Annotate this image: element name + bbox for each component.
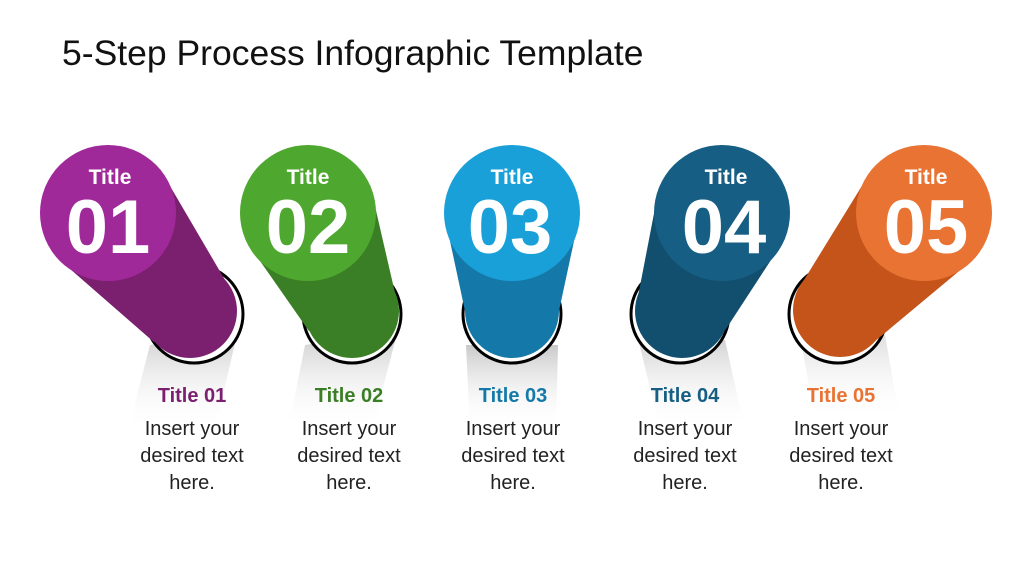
label 02 (297, 385, 401, 494)
label 05: Insert your (794, 418, 889, 440)
title: 5-Step Process Infographic Template (62, 33, 643, 73)
label 01 (140, 385, 244, 494)
label 01: here. (169, 472, 215, 494)
label 05: here. (818, 472, 864, 494)
label 04: Insert your (638, 418, 733, 440)
label 02: desired text (297, 445, 401, 467)
pin 01: Title (89, 166, 131, 189)
label 03: here. (490, 472, 536, 494)
pin 05 (789, 145, 992, 420)
label 04 (633, 385, 737, 494)
pin 03 (444, 145, 580, 430)
pin 03: Title (491, 166, 533, 189)
label 03: desired text (461, 445, 565, 467)
pin 04 (631, 145, 790, 430)
label 01: Insert your (145, 418, 240, 440)
label 04: desired text (633, 445, 737, 467)
pin 01: 01 (66, 185, 150, 270)
label 03: Title 03 (479, 385, 547, 407)
label 04: Title 04 (651, 385, 720, 407)
pin 02: Title (287, 166, 329, 189)
pin 02 (240, 145, 401, 430)
label 04: here. (662, 472, 708, 494)
pin 04: 04 (682, 185, 766, 270)
pin 05: 05 (884, 185, 968, 270)
pin 03: 03 (468, 185, 552, 270)
label 05: Title 05 (807, 385, 875, 407)
pin 01 (40, 145, 243, 430)
label 02: Insert your (302, 418, 397, 440)
label 03 (461, 385, 565, 494)
label 02: here. (326, 472, 372, 494)
label 02: Title 02 (315, 385, 383, 407)
pin 04: Title (705, 166, 747, 189)
pin 02: 02 (266, 185, 350, 270)
pin 05: Title (905, 166, 947, 189)
label 01: Title 01 (158, 385, 226, 407)
label 03: Insert your (466, 418, 561, 440)
label 05: desired text (789, 445, 893, 467)
label 05 (789, 385, 893, 494)
label 01: desired text (140, 445, 244, 467)
